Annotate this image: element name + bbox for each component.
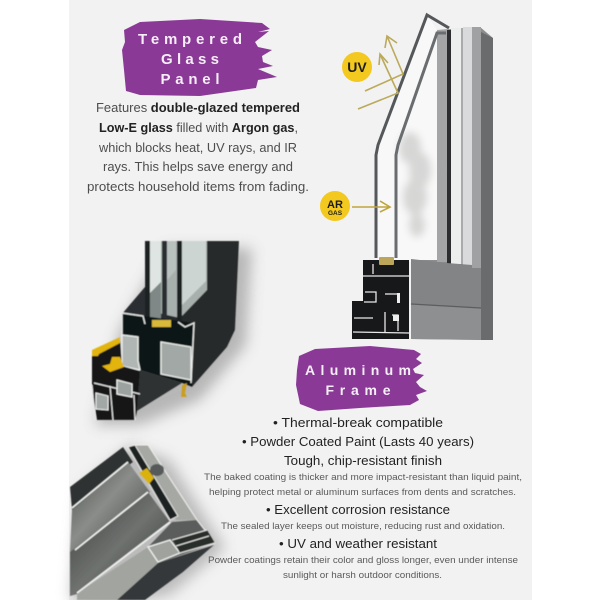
text block: glass description: Low-E glass filled with Argon gas, xyxy=(99,120,298,135)
yellow gaskets xyxy=(92,337,120,356)
yellow gasket xyxy=(139,468,154,484)
text block: glass description: which blocks heat, UV rays, and IR xyxy=(98,140,297,155)
list item: UV: • UV and weather resistant xyxy=(279,536,437,551)
background panel xyxy=(69,0,532,600)
heading: Tempered Glass Panel xyxy=(122,19,277,96)
frame front xyxy=(411,27,493,340)
heading: Aluminum Frame: Aluminum xyxy=(305,362,411,378)
list item: powder coated: • Powder Coated Paint (Lasts 40 years) xyxy=(242,434,474,449)
icon: AR GAS badge: AR xyxy=(327,199,343,211)
text block: glass description: protects household items from fading. xyxy=(87,179,309,194)
heading: Aluminum Frame xyxy=(296,346,427,411)
glass panes xyxy=(376,15,449,258)
spacer xyxy=(379,257,394,265)
description: baked coating: helping protect metal or aluminum surfaces from dents and scratches. xyxy=(209,487,516,497)
description: powder coatings: sunlight or harsh outdoor conditions. xyxy=(283,570,442,580)
side and sill faces xyxy=(122,241,239,387)
glass backing xyxy=(378,16,437,262)
text block: glass description xyxy=(87,100,309,194)
UV arrows xyxy=(358,36,403,109)
list item: thermal break: • Thermal-break compatible xyxy=(273,415,443,430)
description: powder coatings: Powder coatings retain their color and gloss longer, even under intense xyxy=(208,555,518,565)
illustration: glass window section xyxy=(320,15,493,340)
white ribs xyxy=(72,462,170,593)
section profile xyxy=(352,260,409,339)
description: sealed layer: The sealed layer keeps out moisture, reducing rust and oxidation. xyxy=(221,521,505,531)
icon: AR GAS badge: GAS xyxy=(328,210,343,217)
gasket housing xyxy=(150,464,164,476)
glazing xyxy=(145,241,207,318)
heading: Tempered Glass Panel: Tempered xyxy=(138,31,242,48)
section face xyxy=(122,313,194,387)
floor and lower section xyxy=(137,370,182,411)
heading: Tempered Glass Panel: Panel xyxy=(160,71,220,88)
list item: corrosion: • Excellent corrosion resistance xyxy=(266,502,450,517)
description: baked coating xyxy=(204,472,522,497)
text block: aluminum feature list xyxy=(204,415,522,580)
AR arrow xyxy=(352,201,390,212)
argon gas cloud xyxy=(399,132,431,237)
dark glazing band xyxy=(128,445,178,520)
icon: UV badge xyxy=(342,52,372,82)
heading: Aluminum Frame: Frame xyxy=(326,382,391,398)
grey outer channel xyxy=(133,445,197,520)
description: baked coating: The baked coating is thicker and more impact-resistant than liquid paint, xyxy=(204,472,522,482)
heading: Tempered Glass Panel: Glass xyxy=(161,51,219,68)
icon: UV badge: UV xyxy=(347,59,367,75)
hollow box section xyxy=(148,540,180,562)
illustration: angled frame profile xyxy=(70,445,225,600)
ribbed faces xyxy=(70,447,133,510)
description: powder coatings xyxy=(208,555,518,580)
text block: glass description: Features double-glazed tempered xyxy=(96,100,300,115)
illustration: dark frame corner cutaway xyxy=(92,241,252,425)
subheading: tough finish: Tough, chip-resistant finish xyxy=(284,453,442,468)
text block: glass description: rays. This helps save energy and xyxy=(103,159,293,174)
icon: AR GAS badge xyxy=(320,191,350,221)
